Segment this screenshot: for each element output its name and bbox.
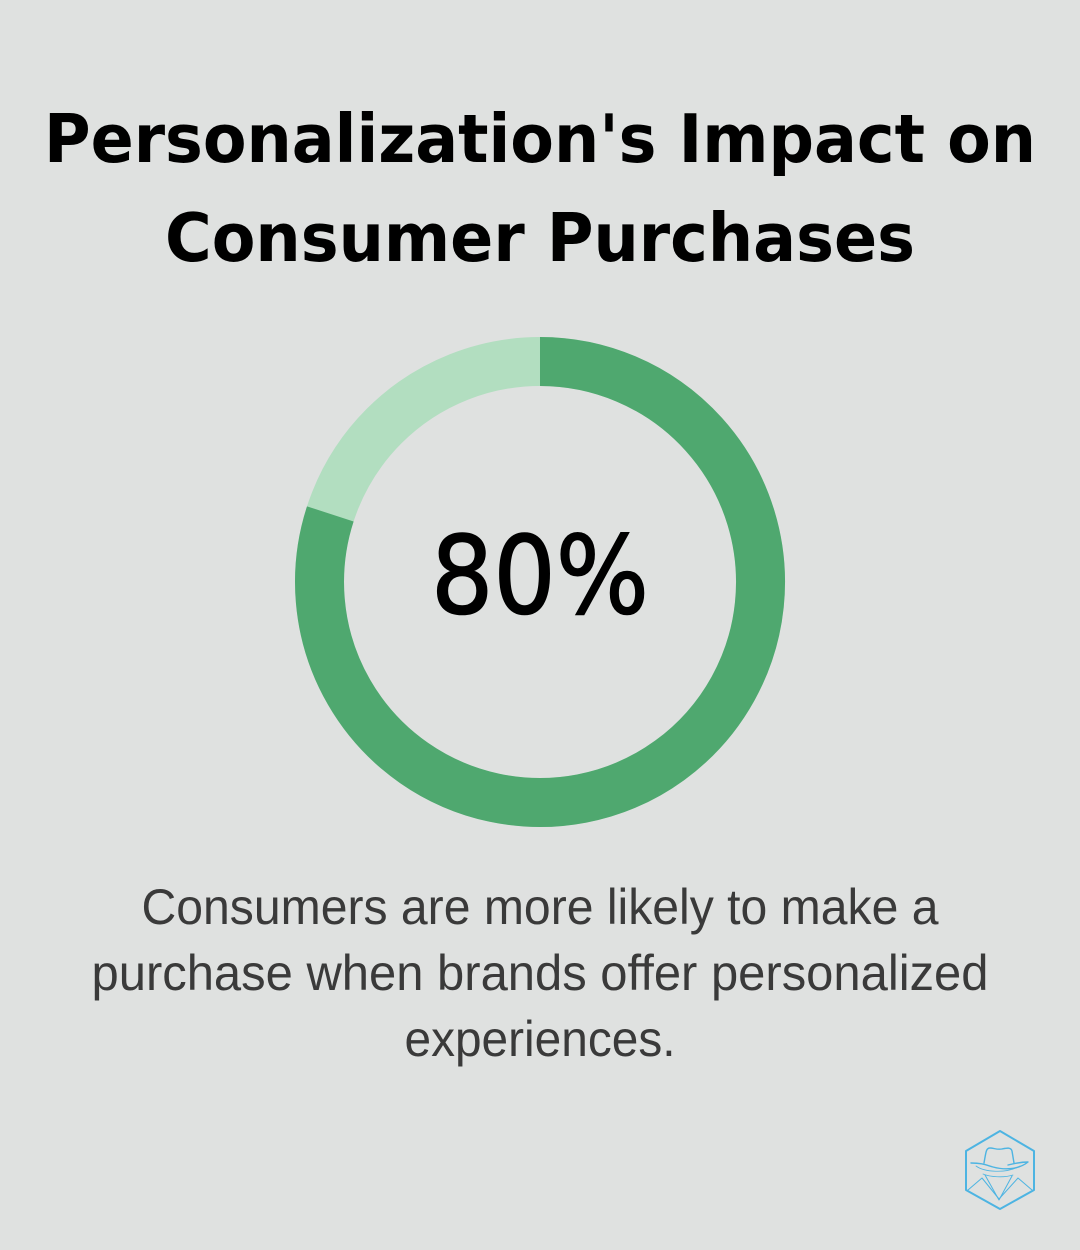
donut value: 80%	[431, 514, 649, 639]
description text: experiences.	[404, 1011, 676, 1067]
icon: hexagon logo with hat and suit	[966, 1131, 1034, 1209]
title	[44, 100, 1036, 277]
description text: purchase when brands offer personalized	[92, 945, 988, 1001]
title: Personalization's Impact on	[44, 100, 1036, 178]
title: Consumer Purchases	[165, 199, 915, 277]
description text: Consumers are more likely to make a	[142, 879, 939, 935]
description text	[92, 879, 988, 1067]
donut chart: 80%	[320, 362, 761, 802]
